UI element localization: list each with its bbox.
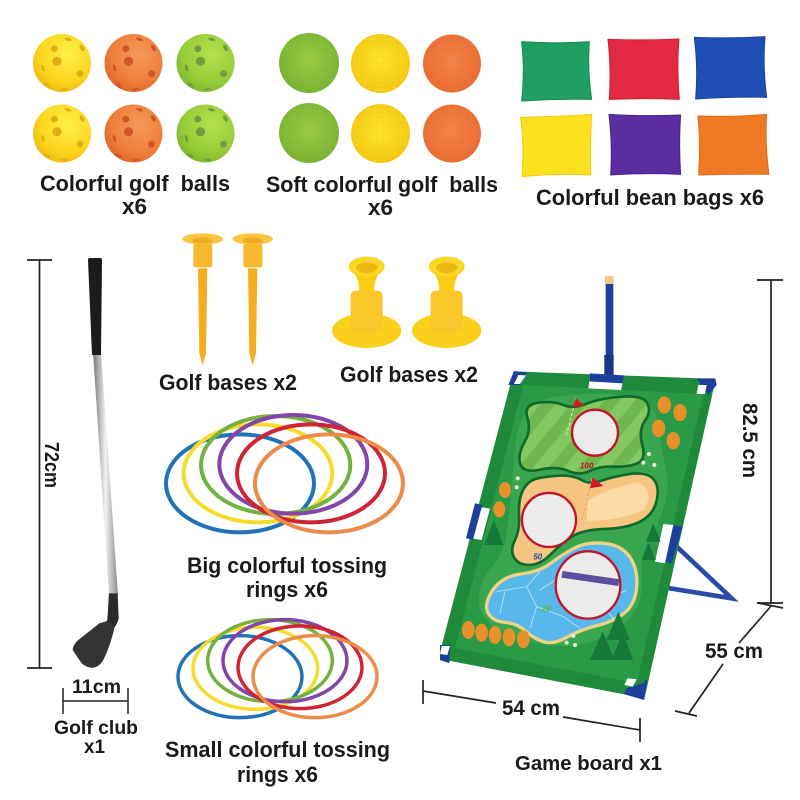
- icon: blue bean bag: [694, 37, 767, 99]
- icon: red bean bag: [608, 39, 679, 99]
- panel: golf tee bases: [159, 233, 481, 395]
- panel: soft colorful golf balls: [266, 33, 498, 220]
- label: colorful bean bags: Colorful bean bags x6: [536, 185, 764, 210]
- icon: soft green ball: [279, 103, 339, 163]
- flags: [566, 398, 603, 522]
- icon: soft yellow ball: [351, 104, 410, 163]
- course background: [479, 394, 667, 646]
- label: quantity: x6: [368, 195, 393, 220]
- icon: soft orange ball: [423, 34, 481, 92]
- dimension: 54 cm width: [423, 680, 640, 742]
- dimension: 11cm head width: [63, 688, 128, 714]
- label: 11cm: 11cm: [72, 677, 121, 698]
- label: golf bases long: Golf bases x2: [159, 370, 297, 395]
- label: quantity: rings x6: [237, 762, 318, 787]
- target holes: [522, 410, 620, 619]
- panel: golf club: [27, 258, 138, 758]
- label: golf bases short: Golf bases x2: [340, 362, 478, 387]
- panel: colorful bean bags: [521, 37, 769, 210]
- icon: orange wiffle ball: [104, 34, 162, 92]
- label: 55 cm: 55 cm: [705, 640, 763, 663]
- icon: yellow wiffle ball: [33, 104, 91, 162]
- chart: big rings: [166, 415, 403, 532]
- icon: short rubber tee: [412, 257, 481, 348]
- label: big colorful tossing rings: Big colorful tossing: [187, 553, 387, 578]
- sand bunker: [512, 473, 658, 565]
- label: 54 cm: 54 cm: [502, 697, 560, 720]
- dimension: 72cm height: [27, 260, 52, 668]
- icon: long tee: [182, 233, 223, 365]
- icon: golf club: [73, 258, 119, 668]
- top fairway: [519, 396, 649, 473]
- dimension: 82.5 cm height: [757, 280, 783, 603]
- panel: colorful golf balls: [33, 34, 234, 219]
- icon: soft green ball: [279, 33, 339, 93]
- label: quantity: x6: [122, 194, 147, 219]
- green trees: [484, 520, 661, 660]
- label: colorful golf balls: Colorful golf balls: [40, 171, 230, 196]
- icon: rear stand: [477, 522, 732, 598]
- icon: soft yellow ball: [351, 34, 410, 93]
- orange bushes: [462, 396, 687, 648]
- icon: soft orange ball: [423, 104, 481, 162]
- board score labels: 100: [580, 461, 594, 470]
- panel: game board: [423, 276, 783, 775]
- icon: long tee: [232, 233, 273, 365]
- label: game board: Game board x1: [515, 753, 662, 775]
- label: soft colorful golf balls: Soft colorful golf balls: [266, 172, 498, 197]
- chart: small rings: [178, 620, 377, 718]
- icon: short rubber tee: [332, 257, 401, 348]
- frame corners and side cut-outs: [440, 371, 717, 700]
- dimension: 55 cm depth: [675, 603, 783, 716]
- icon: orange wiffle ball: [104, 104, 162, 162]
- label: quantity: x1: [84, 737, 105, 758]
- board sheet: -20: [539, 605, 551, 614]
- board sheet: [440, 371, 717, 700]
- board sheet: 50: [533, 552, 543, 561]
- icon: upright pole: [604, 276, 614, 377]
- panel: small tossing rings: [165, 620, 390, 787]
- label: golf club: Golf club: [54, 718, 138, 739]
- icon: green wiffle ball: [176, 104, 234, 162]
- label: quantity: rings x6: [246, 577, 328, 602]
- icon: green bean bag: [522, 42, 592, 101]
- panel: big tossing rings: [166, 415, 403, 602]
- water pond: [487, 543, 637, 643]
- white flowers: [515, 452, 656, 647]
- icon: yellow bean bag: [521, 114, 592, 177]
- icon: yellow wiffle ball: [33, 34, 91, 92]
- label: 82.5 cm: 82.5 cm: [738, 403, 761, 478]
- label: 72cm: 72cm: [40, 442, 62, 488]
- icon: purple bean bag: [609, 114, 681, 175]
- icon: green wiffle ball: [176, 34, 234, 92]
- label: small colorful tossing rings: Small colorful tossing: [165, 737, 390, 762]
- icon: orange bean bag: [698, 114, 769, 175]
